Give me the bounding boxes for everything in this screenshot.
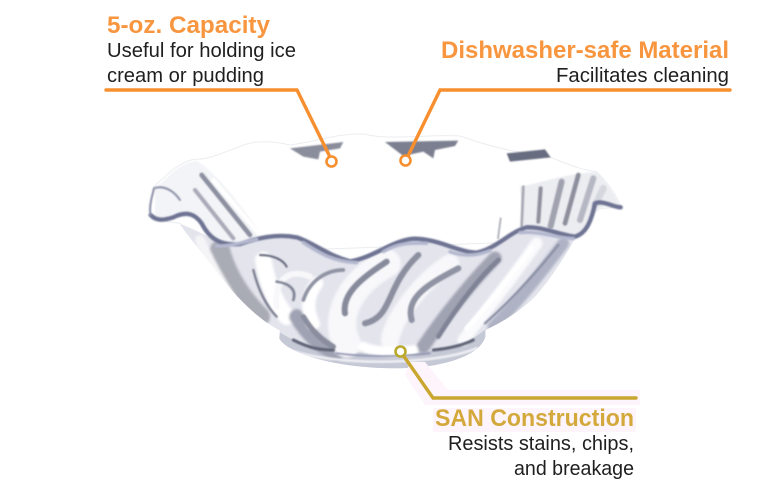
bowl outer body with ribs [180, 224, 574, 368]
icon: clear swirled dessert bowl [150, 134, 621, 380]
broad swirl bands [200, 240, 563, 353]
foot rim shading [290, 340, 477, 362]
dark reflections near the far rim [290, 141, 551, 162]
leader line [403, 355, 636, 398]
foot of the bowl [279, 328, 487, 368]
marker [400, 156, 410, 166]
marker [326, 156, 336, 166]
description [107, 40, 296, 87]
pink halo around the gold callout [405, 362, 640, 432]
front rim band [150, 187, 621, 263]
bowl far rim and interior [151, 134, 621, 253]
fine swirl ribs [253, 245, 558, 347]
description [448, 433, 634, 480]
description: and breakage [514, 458, 634, 480]
right far wall [520, 172, 620, 237]
left far wall [155, 161, 262, 242]
heading: Dishwasher-safe Material [441, 37, 729, 64]
marker [396, 346, 406, 356]
left rim hook [150, 187, 180, 215]
description: Resists stains, chips, [448, 433, 634, 455]
description: Useful for holding ice [107, 40, 296, 62]
heading: 5-oz. Capacity [107, 12, 271, 39]
callout: Dishwasher-safe Material [400, 37, 730, 166]
body base [180, 224, 574, 352]
leader line [408, 90, 730, 155]
callout: 5-oz. Capacity [106, 12, 336, 166]
heading: SAN Construction [435, 405, 634, 432]
leader line [106, 90, 329, 155]
description: cream or pudding [107, 65, 264, 87]
inner reflections on the far wall [195, 175, 603, 238]
description: Facilitates cleaning [556, 65, 729, 87]
callout: SAN Construction [396, 346, 636, 480]
